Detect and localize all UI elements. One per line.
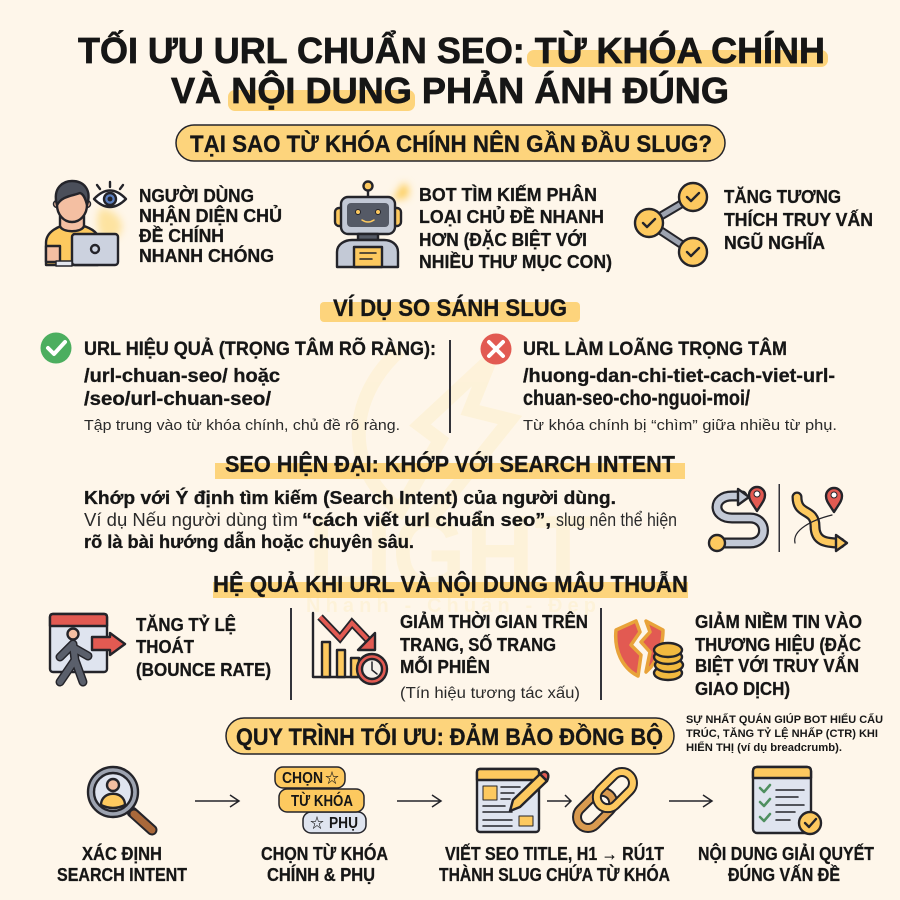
icon: keyword tags: CHỌN	[282, 770, 323, 787]
text: semantic benefit: NGŨ NGHĨA	[724, 232, 825, 253]
step labels: CHỌN TỪ KHÓA	[261, 843, 388, 864]
icon: keyword tags: ☆	[325, 770, 339, 786]
text: user benefit: NHẬN DIỆN CHỦ	[139, 205, 282, 226]
step labels: ĐÚNG VẤN ĐỀ	[728, 864, 840, 885]
text: semantic benefit: THÍCH TRUY VẤN	[724, 209, 873, 230]
icon: keyword tags: TỪ KHÓA	[291, 791, 353, 810]
text: bounce rate: (BOUNCE RATE)	[136, 660, 271, 680]
text: brand trust: GIẢM NIỀM TIN VÀO	[695, 611, 862, 632]
icon: falling chart with clock	[313, 613, 387, 684]
icon: robot	[335, 182, 409, 267]
text block: search intent: “cách viết url chuẩn seo”,	[302, 510, 551, 530]
text: time on page: GIẢM THỜI GIAN TRÊN	[400, 611, 588, 632]
note: consistency: TRÚC, TĂNG TỶ LỆ NHẤP (CTR) KHI	[686, 727, 878, 740]
text: semantic benefit	[724, 186, 873, 253]
text: bounce rate: TĂNG TỶ LỆ	[136, 614, 236, 635]
panel: good url: /seo/url-chuan-seo/	[84, 389, 272, 410]
panel: good url: /url-chuan-seo/ hoặc	[84, 366, 280, 387]
section heading: slug comparison: VÍ DỤ SO SÁNH SLUG	[333, 294, 567, 322]
panel: diluted url: URL LÀM LOÃNG TRỌNG TÂM	[523, 338, 787, 360]
text: bot benefit: BOT TÌM KIẾM PHÂN	[419, 184, 597, 205]
icon: edit document	[477, 769, 548, 832]
icon: search person	[88, 767, 152, 830]
icon: keyword tags: ☆	[310, 815, 324, 831]
text: user benefit	[139, 185, 282, 266]
note: consistency: HIỂN THỊ (ví dụ breadcrumb).	[686, 741, 842, 754]
panel: good url	[40, 332, 436, 434]
text block: search intent	[84, 487, 677, 552]
panel: diluted url	[480, 334, 837, 434]
watermark: brand logo: Nhanh - Chuẩn - Đẹp	[306, 595, 596, 617]
text: bot benefit: NHIỀU THƯ MỤC CON)	[419, 251, 612, 272]
step labels: SEARCH INTENT	[57, 865, 187, 885]
step labels	[57, 843, 874, 885]
step labels: NỘI DUNG GIẢI QUYẾT	[698, 843, 874, 864]
text block: search intent: rõ là bài hướng dẫn hoặc chuyên sâu.	[84, 531, 414, 552]
arrow	[397, 795, 441, 807]
icon: checklist	[753, 767, 821, 834]
text: time on page	[400, 611, 588, 702]
panel: good url: Tập trung vào từ khóa chính, chủ đề rõ ràng.	[84, 417, 400, 434]
text: bounce rate	[136, 614, 271, 680]
panel: good url: URL HIỆU QUẢ (TRỌNG TÂM RÕ RÀNG):	[84, 338, 436, 360]
section heading: consequences: HỆ QUẢ KHI URL VÀ NỘI DUNG MÂU THUẪN	[213, 569, 688, 597]
step labels: CHÍNH & PHỤ	[267, 864, 375, 885]
arrow	[547, 795, 571, 807]
text block: search intent: Khớp với Ý định tìm kiếm (Search Intent) của người dùng.	[84, 487, 616, 508]
text block: search intent: Ví dụ Nếu người dùng tìm	[84, 510, 298, 530]
text: bot benefit: HƠN (ĐẶC BIỆT VỚI	[419, 229, 587, 250]
section heading: modern seo: SEO HIỆN ĐẠI: KHỚP VỚI SEARCH INTENT	[225, 450, 675, 477]
text: brand trust	[695, 611, 862, 699]
icon: red cross	[480, 334, 512, 364]
text: semantic benefit: TĂNG TƯƠNG	[724, 186, 841, 207]
icon: broken shield and coins	[616, 621, 683, 680]
panel: diluted url: chuan-seo-cho-nguoi-moi/	[523, 387, 750, 410]
title: TỐI ƯU URL CHUẨN SEO: TỪ KHÓA CHÍNH	[78, 29, 825, 71]
text: user benefit: NHANH CHÓNG	[139, 245, 274, 266]
icon: green check	[40, 332, 72, 364]
step labels: THÀNH SLUG CHỨA TỪ KHÓA	[439, 864, 670, 885]
note: consistency	[686, 713, 883, 754]
step labels: XÁC ĐỊNH	[82, 843, 162, 864]
panel: diluted url: /huong-dan-chi-tiet-cach-viet-url-	[523, 366, 835, 387]
arrow	[669, 795, 712, 807]
icon: confused route	[795, 488, 847, 551]
panel: diluted url: Từ khóa chính bị “chìm” giữa nhiều từ phụ.	[523, 417, 837, 434]
arrow	[195, 795, 239, 807]
section heading: why keyword first: TẠI SAO TỪ KHÓA CHÍNH NÊN GẦN ĐẦU SLUG?	[190, 130, 712, 158]
icon: keyword tags: PHỤ	[329, 815, 358, 832]
text: time on page: (Tín hiệu tương tác xấu)	[400, 685, 580, 702]
icon: bounce exit	[50, 614, 125, 682]
text: time on page: MỖI PHIÊN	[400, 656, 490, 677]
icon: connected checks	[635, 183, 707, 266]
watermark: brand logo	[306, 350, 596, 617]
text: bot benefit	[419, 184, 612, 272]
text: brand trust: GIAO DỊCH)	[695, 679, 790, 699]
icon: chain link	[572, 767, 638, 833]
text: user benefit: ĐỀ CHÍNH	[139, 225, 224, 246]
text: user benefit: NGƯỜI DÙNG	[139, 185, 254, 206]
text: brand trust: BIỆT VỚI TRUY VẤN	[695, 655, 859, 676]
icon: clear route	[709, 487, 765, 551]
text: bot benefit: LOẠI CHỦ ĐỀ NHANH	[419, 206, 604, 227]
text: bounce rate: THOÁT	[136, 636, 194, 657]
text: brand trust: THƯƠNG HIỆU (ĐẶC	[695, 634, 861, 655]
title: VÀ NỘI DUNG PHẢN ÁNH ĐÚNG	[171, 69, 729, 111]
text block: search intent: slug nên thể hiện	[556, 510, 677, 530]
title	[78, 29, 828, 111]
watermark: brand logo: LIGHT	[308, 495, 592, 611]
note: consistency: SỰ NHẤT QUÁN GIÚP BOT HIỂU CẤU	[686, 713, 883, 726]
section heading: process	[226, 718, 674, 754]
step labels: VIẾT SEO TITLE, H1 → RÚ1T	[445, 843, 664, 864]
icon: keyword tags	[275, 767, 366, 833]
icon: user at laptop with eye	[46, 181, 126, 266]
text: time on page: TRANG, SỐ TRANG	[400, 634, 556, 655]
section heading: process: QUY TRÌNH TỐI ƯU: ĐẢM BẢO ĐỒNG BỘ	[236, 722, 663, 751]
